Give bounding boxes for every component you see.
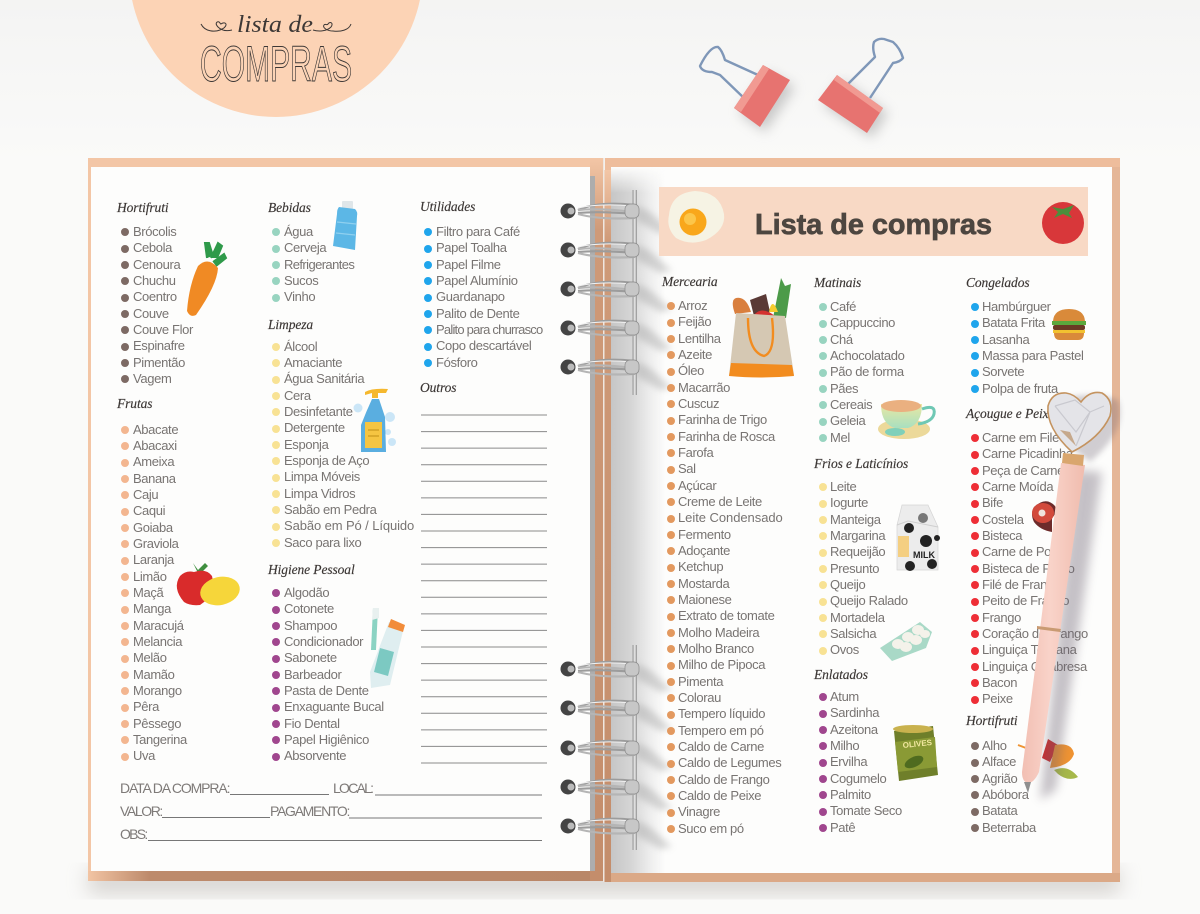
ruled lines: form xyxy=(148,794,542,840)
list: Hortifruti: Couve xyxy=(133,306,169,321)
ruled lines: Outros xyxy=(421,415,547,763)
list: Mercearia: Leite Condensado xyxy=(678,510,783,525)
list: Frios e Laticínios: Salsicha xyxy=(830,626,876,641)
list: Frutas: Goiaba xyxy=(133,520,173,535)
list: Enlatados: Azeitona xyxy=(830,722,878,737)
list: Limpeza: Esponja xyxy=(284,437,328,452)
list: Enlatados: Palmito xyxy=(830,787,871,802)
list: Matinais: Mel xyxy=(830,430,850,445)
badge lettering: lista de xyxy=(237,12,313,38)
badge lettering xyxy=(200,12,352,92)
list: Limpeza: Água Sanitária xyxy=(284,371,364,386)
list: Frutas: Abacate xyxy=(133,422,178,437)
list: Bebidas: Bebidas xyxy=(268,200,311,215)
list: Hortifruti: Cebola xyxy=(133,240,172,255)
list: Higiene Pessoal: Fio Dental xyxy=(284,716,340,731)
list: Hortifruti (right): Alface xyxy=(982,754,1016,769)
list: Matinais: Achocolatado xyxy=(830,348,904,363)
list: Frutas: Melão xyxy=(133,650,167,665)
list: Higiene Pessoal: Condicionador xyxy=(284,634,363,649)
list: Frutas: Limão xyxy=(133,569,167,584)
list: Frios e Laticínios: Mortadela xyxy=(830,610,885,625)
list: Mercearia: Maionese xyxy=(678,592,732,607)
list: Frios e Laticínios xyxy=(814,456,908,657)
list: Mercearia: Farofa xyxy=(678,445,713,460)
list: Açougue e Peixe: Carne Moída xyxy=(982,479,1053,494)
list: Frios e Laticínios: Iogurte xyxy=(830,495,868,510)
list: Utilidades: Fósforo xyxy=(436,355,478,370)
list: Frios e Laticínios: Manteiga xyxy=(830,512,881,527)
list: Higiene Pessoal xyxy=(268,562,384,763)
list: Frios e Laticínios: Frios e Laticínios xyxy=(814,456,908,471)
list: Frutas: Ameixa xyxy=(133,454,174,469)
list: Higiene Pessoal: Higiene Pessoal xyxy=(268,562,355,577)
list: Limpeza: Amaciante xyxy=(284,355,342,370)
list: Higiene Pessoal: Barbeador xyxy=(284,667,341,682)
list: Açougue e Peixe: Costela xyxy=(982,512,1024,527)
list: Frutas: Caju xyxy=(133,487,158,502)
list: Frutas: Frutas xyxy=(117,396,152,411)
title banner xyxy=(659,187,1088,256)
form: local: LOCAL: xyxy=(333,780,372,796)
spiral binding: top xyxy=(560,190,639,395)
list: Matinais: Café xyxy=(830,299,856,314)
list: Limpeza: Desinfetante xyxy=(284,404,353,419)
list: Utilidades: Copo descartável xyxy=(436,338,531,353)
list: Açougue e Peixe: Frango xyxy=(982,610,1021,625)
list: Mercearia: Mostarda xyxy=(678,576,729,591)
list: Utilidades: Papel Filme xyxy=(436,257,501,272)
list: Mercearia: Molho Madeira xyxy=(678,625,759,640)
top badge circle xyxy=(129,0,423,117)
spiral binding: bottom xyxy=(560,645,639,850)
list: Limpeza: Álcool xyxy=(284,339,317,354)
icon: apple and lemon xyxy=(177,563,242,609)
form: data da compra: DATA DA COMPRA: xyxy=(120,780,229,796)
form: obs: OBS: xyxy=(120,826,146,842)
list: Hortifruti: Coentro xyxy=(133,289,177,304)
list: Hortifruti: Pimentão xyxy=(133,355,185,370)
list: Matinais: Matinais xyxy=(814,275,861,290)
list: Higiene Pessoal: Shampoo xyxy=(284,618,337,633)
list: Enlatados: Ervilha xyxy=(830,754,867,769)
list: Congelados xyxy=(966,275,1084,396)
list: Frutas: Abacaxi xyxy=(133,438,177,453)
list: Frutas: Pêra xyxy=(133,699,159,714)
ring shadows xyxy=(636,205,672,849)
list: Mercearia: Colorau xyxy=(678,690,721,705)
list: Frios e Laticínios: Presunto xyxy=(830,561,879,576)
list: Hortifruti (right): Batata xyxy=(982,803,1017,818)
list: Frutas: Caqui xyxy=(133,503,165,518)
list: Frutas: Maçã xyxy=(133,585,163,600)
list: Congelados: Polpa de fruta xyxy=(982,381,1058,396)
list: Congelados: Massa para Pastel xyxy=(982,348,1084,363)
list: Hortifruti: Couve Flor xyxy=(133,322,193,337)
list: Açougue e Peixe: Bisteca xyxy=(982,528,1022,543)
pen xyxy=(1022,392,1111,793)
list: Mercearia: Extrato de tomate xyxy=(678,608,774,623)
list: Mercearia: Adoçante xyxy=(678,543,730,558)
icon: olives can: OLIVES xyxy=(902,738,933,750)
list: Bebidas xyxy=(268,200,354,304)
icon: milk carton: MILK xyxy=(913,550,935,560)
list: Mercearia: Tempero em pó xyxy=(678,723,764,738)
list: Higiene Pessoal: Enxaguante Bucal xyxy=(284,699,384,714)
list: Mercearia: Suco em pó xyxy=(678,821,744,836)
list: Matinais: Pães xyxy=(830,381,858,396)
binder clip right xyxy=(818,39,903,133)
icon: vegetables xyxy=(1018,739,1078,779)
list: Congelados: Congelados xyxy=(966,275,1030,290)
list: Hortifruti: Vagem xyxy=(133,371,171,386)
list: Hortifruti: Hortifruti xyxy=(117,200,169,215)
list: Açougue e Peixe: Peito de Frango xyxy=(982,593,1069,608)
list: Frutas: Maracujá xyxy=(133,618,184,633)
list: Utilidades: Guardanapo xyxy=(436,289,505,304)
list: Frutas: Graviola xyxy=(133,536,179,551)
list: Mercearia: Fermento xyxy=(678,527,731,542)
list: Utilidades: Papel Alumínio xyxy=(436,273,518,288)
list: Mercearia: Arroz xyxy=(678,298,707,313)
list: Mercearia: Caldo de Frango xyxy=(678,772,769,787)
icon: tomato xyxy=(1042,202,1084,244)
list: Mercearia: Farinha de Trigo xyxy=(678,412,767,427)
list: Frios e Laticínios: Queijo xyxy=(830,577,865,592)
list: Frios e Laticínios: Ovos xyxy=(830,642,859,657)
list: Açougue e Peixe: Peça de Carne xyxy=(982,463,1064,478)
list: Higiene Pessoal: Algodão xyxy=(284,585,329,600)
list: Hortifruti: Brócolis xyxy=(133,224,176,239)
list: Higiene Pessoal: Sabonete xyxy=(284,650,337,665)
list: Matinais: Geleia xyxy=(830,413,865,428)
list: Higiene Pessoal: Papel Higiênico xyxy=(284,732,369,747)
spine line xyxy=(603,158,604,882)
list: Hortifruti (right): Hortifruti xyxy=(966,713,1018,728)
badge lettering: COMPRAS xyxy=(200,36,352,92)
list: Utilidades: Utilidades xyxy=(420,199,475,214)
icon: hamburger xyxy=(1052,309,1086,340)
list: Limpeza: Limpeza xyxy=(268,317,313,332)
list: Mercearia: Caldo de Legumes xyxy=(678,755,781,770)
list: Hortifruti: Espinafre xyxy=(133,338,185,353)
list: Açougue e Peixe: Açougue e Peixe xyxy=(966,406,1054,421)
list: Mercearia: Milho de Pipoca xyxy=(678,657,765,672)
list: Enlatados: Patê xyxy=(830,820,855,835)
icon: spray bottle xyxy=(354,389,396,452)
list: Limpeza: Limpa Móveis xyxy=(284,469,360,484)
list: Higiene Pessoal: Cotonete xyxy=(284,601,334,616)
pen shadow xyxy=(1040,470,1102,800)
icon: milk carton xyxy=(897,505,940,571)
list: Bebidas: Vinho xyxy=(284,289,315,304)
list: Frutas: Morango xyxy=(133,683,182,698)
list: Açougue e Peixe: Bisteca de Porco xyxy=(982,561,1075,576)
list: Frutas: Uva xyxy=(133,748,155,763)
list: Enlatados: Cogumelo xyxy=(830,771,886,786)
list: Matinais: Cereais xyxy=(830,397,872,412)
list: Açougue e Peixe: Filé de Frango xyxy=(982,577,1061,592)
list: Utilidades xyxy=(420,199,543,370)
list: Limpeza xyxy=(268,317,414,550)
list: Matinais: Pão de forma xyxy=(830,364,904,379)
list: Açougue e Peixe: Carne de Porco xyxy=(982,544,1068,559)
list: Matinais xyxy=(814,275,904,445)
list: Mercearia: Macarrão xyxy=(678,380,730,395)
list: Mercearia: Ketchup xyxy=(678,559,723,574)
list: Frutas: Tangerina xyxy=(133,732,187,747)
list: Limpeza: Limpa Vidros xyxy=(284,486,355,501)
book shadow xyxy=(88,868,1120,894)
list: Utilidades: Filtro para Café xyxy=(436,224,520,239)
list: Frutas: Melancia xyxy=(133,634,182,649)
list: Enlatados: Tomate Seco xyxy=(830,803,902,818)
list: Hortifruti (right): Abóbora xyxy=(982,787,1029,802)
list: Hortifruti xyxy=(116,200,194,386)
list: Mercearia: Molho Branco xyxy=(678,641,754,656)
icon: steak xyxy=(1032,501,1056,532)
icon: tea cup xyxy=(878,400,934,439)
list: Mercearia: Pimenta xyxy=(678,674,723,689)
list: Frutas: Pêssego xyxy=(133,716,181,730)
list: Enlatados: Sardinha xyxy=(830,705,879,720)
panel: right cover xyxy=(604,158,1120,882)
list: Açougue e Peixe: Peixe xyxy=(982,691,1013,706)
list: Mercearia: Sal xyxy=(678,461,696,476)
list: Frutas: Manga xyxy=(133,601,171,616)
list: Frios e Laticínios: Leite xyxy=(830,479,856,494)
list: Matinais: Cappuccino xyxy=(830,315,895,330)
list: Mercearia: Farinha de Rosca xyxy=(678,429,775,444)
list: Frutas: Mamão xyxy=(133,667,175,682)
list: Açougue e Peixe: Linguiça Toscana xyxy=(982,642,1076,657)
list: Mercearia: Caldo de Carne xyxy=(678,739,764,754)
gutter shadow on right page xyxy=(611,171,658,873)
list: Limpeza: Cera xyxy=(284,388,311,403)
list: Frios e Laticínios: Requeijão xyxy=(830,544,885,559)
list: Enlatados: Milho xyxy=(830,738,859,753)
panel: left page lists xyxy=(116,199,543,842)
list: Bebidas: Cerveja xyxy=(284,240,326,255)
list: Açougue e Peixe: Carne em Filé xyxy=(982,430,1059,445)
panel: left cover xyxy=(88,158,603,881)
list: Frios e Laticínios: Margarina xyxy=(830,528,885,543)
icon: toothpaste and brush xyxy=(370,608,405,688)
list: Hortifruti (right): Beterraba xyxy=(982,820,1036,835)
icon: water bottle xyxy=(333,201,357,250)
list: Hortifruti (right) xyxy=(966,713,1036,835)
list: Utilidades: Papel Toalha xyxy=(436,240,507,255)
list: Congelados: Lasanha xyxy=(982,332,1029,347)
list: Mercearia: Feijão xyxy=(678,314,711,329)
panel: right page lists xyxy=(662,274,1088,836)
list: Hortifruti (right): Agrião xyxy=(982,771,1017,786)
heart shadow xyxy=(1060,395,1120,462)
binder clip left xyxy=(700,47,790,127)
list: Frutas: Laranja xyxy=(133,552,174,567)
title: Lista de compras xyxy=(755,209,992,241)
list: Congelados: Sorvete xyxy=(982,364,1024,379)
list: Higiene Pessoal: Absorvente xyxy=(284,748,346,763)
list: Enlatados: Enlatados xyxy=(814,667,868,682)
list: Enlatados xyxy=(814,667,902,835)
icon: grocery bag xyxy=(729,278,794,378)
list: Frios e Laticínios: Queijo Ralado xyxy=(830,593,908,608)
icon: carrot xyxy=(187,243,226,316)
list: Enlatados: Atum xyxy=(830,689,859,704)
icon: olives can xyxy=(893,725,938,781)
list: Utilidades: Palito para churrasco xyxy=(436,322,542,337)
list: Mercearia: Tempero líquido xyxy=(678,706,765,721)
list: Mercearia: Óleo xyxy=(678,363,704,378)
list: Mercearia: Açúcar xyxy=(678,478,716,493)
list: Mercearia: Cuscuz xyxy=(678,396,719,411)
list: Hortifruti: Cenoura xyxy=(133,257,180,272)
list: Limpeza: Detergente xyxy=(284,420,345,435)
list: Açougue e Peixe: Carne Picadinha xyxy=(982,446,1073,461)
list: Mercearia: Caldo de Peixe xyxy=(678,788,761,803)
list: Mercearia: Creme de Leite xyxy=(678,494,762,509)
list: Bebidas: Sucos xyxy=(284,273,318,288)
heading: Outros: Outros xyxy=(420,380,456,395)
form: pagamento: PAGAMENTO: xyxy=(270,803,349,819)
list: Limpeza: Sabão em Pedra xyxy=(284,502,377,517)
icon: egg tray xyxy=(880,622,932,661)
list: Higiene Pessoal: Pasta de Dente xyxy=(284,683,369,698)
list: Açougue e Peixe xyxy=(965,406,1088,706)
list: Mercearia: Lentilha xyxy=(678,331,721,346)
list: Utilidades: Palito de Dente xyxy=(436,306,520,321)
icon: fried egg xyxy=(668,191,724,243)
list: Mercearia: Vinagre xyxy=(678,804,720,819)
list: Frutas: Banana xyxy=(133,471,176,486)
list: Açougue e Peixe: Bacon xyxy=(982,675,1017,690)
list: Matinais: Chá xyxy=(830,332,853,347)
list: Frutas xyxy=(116,396,188,763)
list: Hortifruti (right): Alho xyxy=(982,738,1007,753)
list: Hortifruti: Chuchu xyxy=(133,273,176,288)
list: Açougue e Peixe: Coração de Frango xyxy=(982,626,1088,641)
form: valor: VALOR: xyxy=(120,803,162,819)
list: Limpeza: Esponja de Aço xyxy=(284,453,369,468)
list: Congelados: Batata Frita xyxy=(982,315,1045,330)
list: Bebidas: Refrigerantes xyxy=(284,257,354,272)
list: Limpeza: Sabão em Pó / Líquido xyxy=(284,518,414,533)
list: Açougue e Peixe: Linguiça Calabresa xyxy=(982,659,1087,674)
list: Mercearia xyxy=(662,274,783,836)
list: Limpeza: Saco para lixo xyxy=(284,535,361,550)
list: Mercearia: Mercearia xyxy=(662,274,718,289)
list: Congelados: Hambúrguer xyxy=(982,299,1051,314)
list: Bebidas: Água xyxy=(284,224,313,239)
list: Açougue e Peixe: Bife xyxy=(982,495,1003,510)
binder clip shadows xyxy=(739,72,888,138)
list: Mercearia: Azeite xyxy=(678,347,712,362)
